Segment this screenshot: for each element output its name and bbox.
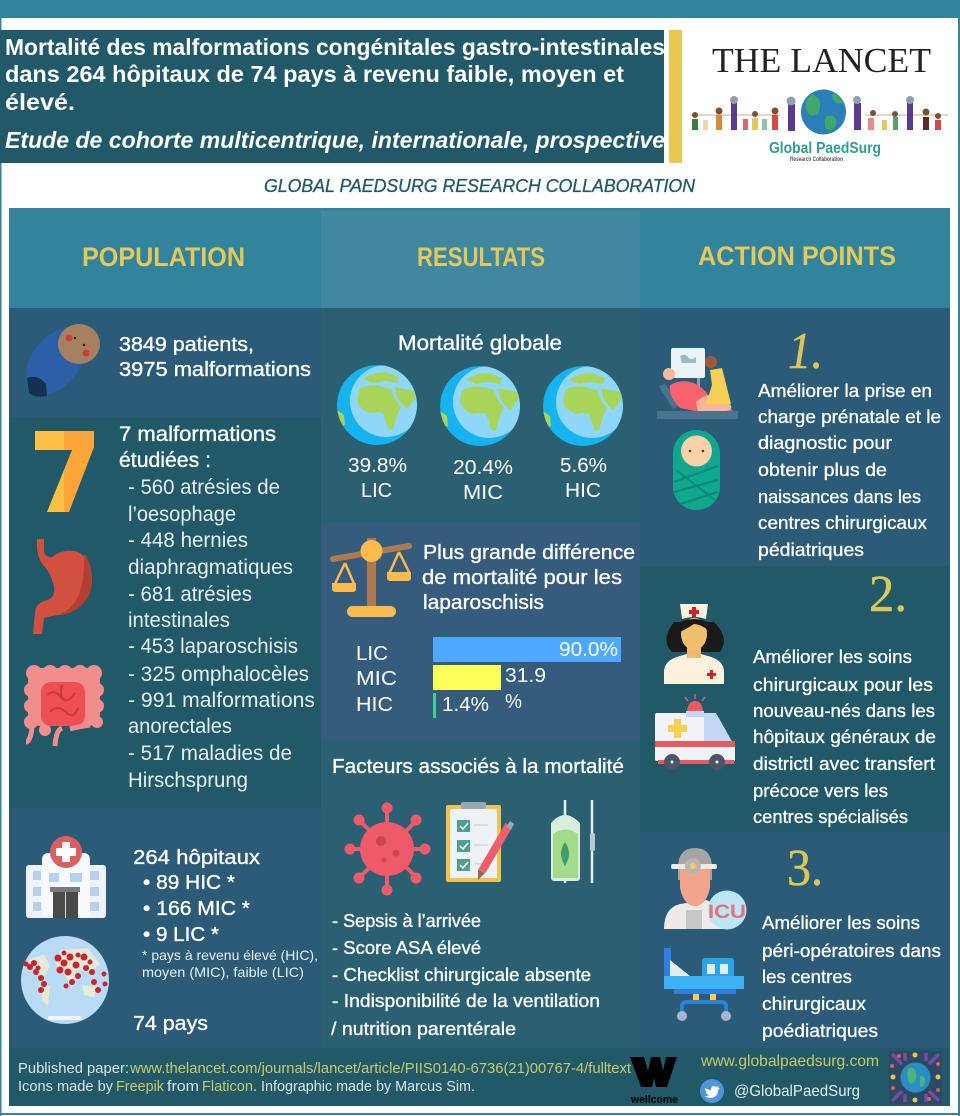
- panel: mortalité globale: Mortalité globale: [398, 332, 562, 355]
- panel: mortalité globale: LIC: [361, 480, 392, 502]
- panel: action point 1: centres chirurgicaux: [758, 513, 927, 533]
- panel: patients: 3975 malformations: [119, 359, 311, 381]
- panel: hospitals: * pays à revenu élevé (HIC),: [142, 947, 318, 963]
- icon: IV drip: [551, 800, 595, 883]
- column headers: POPULATION: [82, 242, 245, 272]
- bar chart: mortality by income: [356, 637, 621, 718]
- logos: The Lancet and Global PaedSurg: Research Collaboration: [790, 157, 843, 163]
- panel: malformations: intestinales: [128, 609, 230, 632]
- panel: action point 3: poédiatriques: [762, 1021, 878, 1041]
- panel: action point 3: chirurgicaux: [762, 994, 866, 1014]
- credits: Icons made by: [18, 1078, 113, 1095]
- credits: . Infographic made by Marcus Sim.: [253, 1078, 475, 1095]
- panel: malformations: - 517 maladies de: [128, 742, 292, 765]
- icon: number seven: [35, 431, 94, 512]
- panel: hospitals: [9, 808, 321, 1048]
- credits: Published paper:: [18, 1060, 129, 1077]
- panel: action point 2: chirurgicaux pour les: [753, 675, 933, 695]
- panel: action point 2: districtI avec transfert: [753, 754, 935, 774]
- panel: action point 1: pédiatriques: [758, 540, 864, 560]
- icon: stomach: [33, 539, 92, 634]
- logos: The Lancet and Global PaedSurg: [690, 41, 948, 163]
- bar chart: mortality by income: MIC: [356, 668, 397, 690]
- panel: malformations: Hirschsprung: [128, 769, 248, 792]
- logos: The Lancet and Global PaedSurg: Global PaedSurg: [769, 140, 881, 157]
- title banner: [0, 30, 665, 163]
- icon: nurse: [664, 604, 724, 684]
- panel: facteurs associés: - Indisponibilité de la ventilation: [332, 991, 600, 1011]
- panel: malformations: - 560 atrésies de: [128, 476, 280, 499]
- panel: malformations: étudiées :: [119, 449, 211, 472]
- subtitle: GLOBAL PAEDSURG RESEARCH COLLABORATION: [264, 176, 696, 196]
- icon: swaddled newborn: [673, 430, 720, 510]
- credits: www.thelancet.com/journals/lancet/article/PIIS0140-6736(21)00767-4/fulltext: [129, 1060, 632, 1077]
- icon: intestine: [24, 665, 104, 746]
- bar chart: mortality by income: 90.0%: [559, 639, 618, 661]
- panel: facteurs associés: Facteurs associés à la mortalité: [332, 756, 624, 778]
- panel: malformations: anorectales: [128, 715, 232, 738]
- panel: action point 2: nouveau-nés dans les: [753, 701, 935, 721]
- panel: action point 1: diagnostic pour: [758, 433, 892, 453]
- panel: malformations: - 991 malformations: [128, 689, 315, 712]
- title banner: dans 264 hôpitaux de 74 pays à revenu faible, moyen et: [5, 61, 624, 87]
- panel: action point 1: obtenir plus de: [758, 460, 887, 480]
- icon: globe LIC: [337, 365, 422, 445]
- column headers: RESULTATS: [417, 242, 545, 272]
- column headers: ACTION POINTS: [698, 241, 896, 271]
- panel: hospitals: • 9 LIC *: [143, 924, 219, 946]
- logos: The Lancet and Global PaedSurg: THE LANCET: [712, 41, 931, 80]
- footer: [9, 1048, 950, 1106]
- panel: mortalité globale: 5.6%: [560, 455, 607, 477]
- icon: hospital bed: [664, 948, 744, 1021]
- panel: action point 1: Améliorer la prise en: [758, 381, 932, 401]
- title banner: Etude de cohorte multicentrique, internationale, prospective: [5, 127, 665, 153]
- credits: from: [167, 1078, 199, 1095]
- bar chart: mortality by income: 1.4%: [442, 694, 489, 716]
- credits: [18, 1060, 632, 1095]
- panel: malformations: l’oesophage: [128, 503, 236, 526]
- bar chart: mortality by income: %: [505, 691, 522, 713]
- panel: facteurs associés: - Checklist chirurgicale absente: [332, 965, 591, 985]
- panel: facteurs associés: - Score ASA élevé: [332, 938, 481, 958]
- panel: mortalité globale: [321, 308, 640, 522]
- bar chart: mortality by income: LIC: [356, 643, 388, 665]
- icon: ICU doctor: [664, 848, 746, 930]
- bar chart: mortality by income: 31.9: [505, 665, 546, 687]
- panel: action point 1: [640, 308, 950, 566]
- panel: action point 1: 1.: [788, 323, 823, 380]
- panel: action point 3: les centres: [762, 967, 852, 987]
- icon: scales: [332, 538, 411, 617]
- panel: action point 1: naissances dans les: [758, 487, 921, 507]
- credits: Freepik: [116, 1078, 164, 1095]
- panel: action point 3: péri-opératoires dans: [762, 941, 941, 961]
- panel: action point 2: Améliorer les soins: [753, 647, 912, 667]
- icon: globe HIC: [543, 366, 628, 446]
- yellow accent bar: [669, 30, 682, 163]
- panel: malformations: - 448 hernies: [128, 529, 248, 552]
- panel: action point 2: [640, 566, 950, 832]
- panel: malformations: [9, 418, 321, 808]
- title banner: élevé.: [5, 89, 75, 115]
- panel: patients: [9, 308, 321, 418]
- panel: laparoschisis: [321, 522, 640, 740]
- footer: www.globalpaedsurg.com: [700, 1053, 879, 1070]
- panel: action point 1: charge prénatale et le: [758, 407, 941, 427]
- panel: action point 3: Améliorer les soins: [762, 913, 920, 933]
- panel: hospitals: 74 pays: [133, 1013, 208, 1035]
- panel: mortalité globale: HIC: [565, 480, 601, 502]
- panel: hospitals: 264 hôpitaux: [133, 847, 260, 869]
- icon: hospital: [26, 836, 106, 918]
- panel: mortalité globale: MIC: [463, 482, 503, 504]
- panel: hospitals: • 89 HIC *: [143, 872, 235, 894]
- panel: mortalité globale: 20.4%: [453, 457, 513, 479]
- panel: malformations: diaphragmatiques: [128, 556, 293, 579]
- icon: prenatal ultrasound: [657, 348, 738, 419]
- icon: Twitter: [700, 1079, 724, 1103]
- bar chart: mortality by income: HIC: [356, 694, 393, 716]
- panel: laparoschisis: Plus grande différence: [423, 542, 635, 564]
- icon: swaddled baby: [26, 324, 100, 397]
- panel: mortalité globale: 39.8%: [348, 455, 407, 477]
- panel: action point 2: centres spécialisés: [753, 807, 908, 827]
- panel: laparoschisis: laparoschisis: [423, 592, 544, 614]
- column headers: [9, 208, 950, 308]
- logo: Wellcome: [630, 1057, 678, 1106]
- footer: @GlobalPaedSurg: [734, 1083, 860, 1100]
- icon: ICU doctor: ICU: [708, 902, 746, 923]
- panel: malformations: - 453 laparoschisis: [128, 635, 298, 658]
- icon: globe MIC: [440, 366, 525, 446]
- logo: round PaedSurg: [889, 1051, 942, 1104]
- panel: action point 2: hôpitaux généraux de: [753, 727, 936, 747]
- panel: facteurs associés: [321, 740, 640, 1048]
- panel: action point 2: 2.: [869, 566, 907, 623]
- panel: hospitals: • 166 MIC *: [143, 898, 250, 920]
- panel: action point 3: 3.: [787, 840, 823, 897]
- panel: malformations: 7 malformations: [119, 423, 276, 446]
- panel: hospitals: moyen (MIC), faible (LIC): [142, 964, 304, 980]
- panel: facteurs associés: / nutrition parentérale: [331, 1019, 516, 1039]
- logo: Wellcome: wellcome: [630, 1094, 678, 1106]
- panel: action point 2: précoce vers les: [753, 781, 888, 801]
- panel: malformations: - 325 omphalocèles: [128, 663, 309, 686]
- icon: world map with hospital pins: [21, 936, 109, 1024]
- icon: virus: [344, 802, 430, 896]
- panel: action point 3: [640, 832, 950, 1048]
- panel: patients: 3849 patients,: [119, 334, 254, 356]
- icon: checklist: [446, 802, 514, 882]
- icon: ambulance: [655, 694, 735, 770]
- credits: Flaticon: [202, 1078, 253, 1095]
- panel: facteurs associés: - Sepsis à l’arrivée: [332, 911, 481, 931]
- title banner: Mortalité des malformations congénitales gastro-intestinales: [5, 34, 665, 60]
- globe and children: [690, 90, 948, 134]
- panel: laparoschisis: de mortalité pour les: [422, 567, 622, 589]
- panel: malformations: - 681 atrésies: [128, 583, 252, 606]
